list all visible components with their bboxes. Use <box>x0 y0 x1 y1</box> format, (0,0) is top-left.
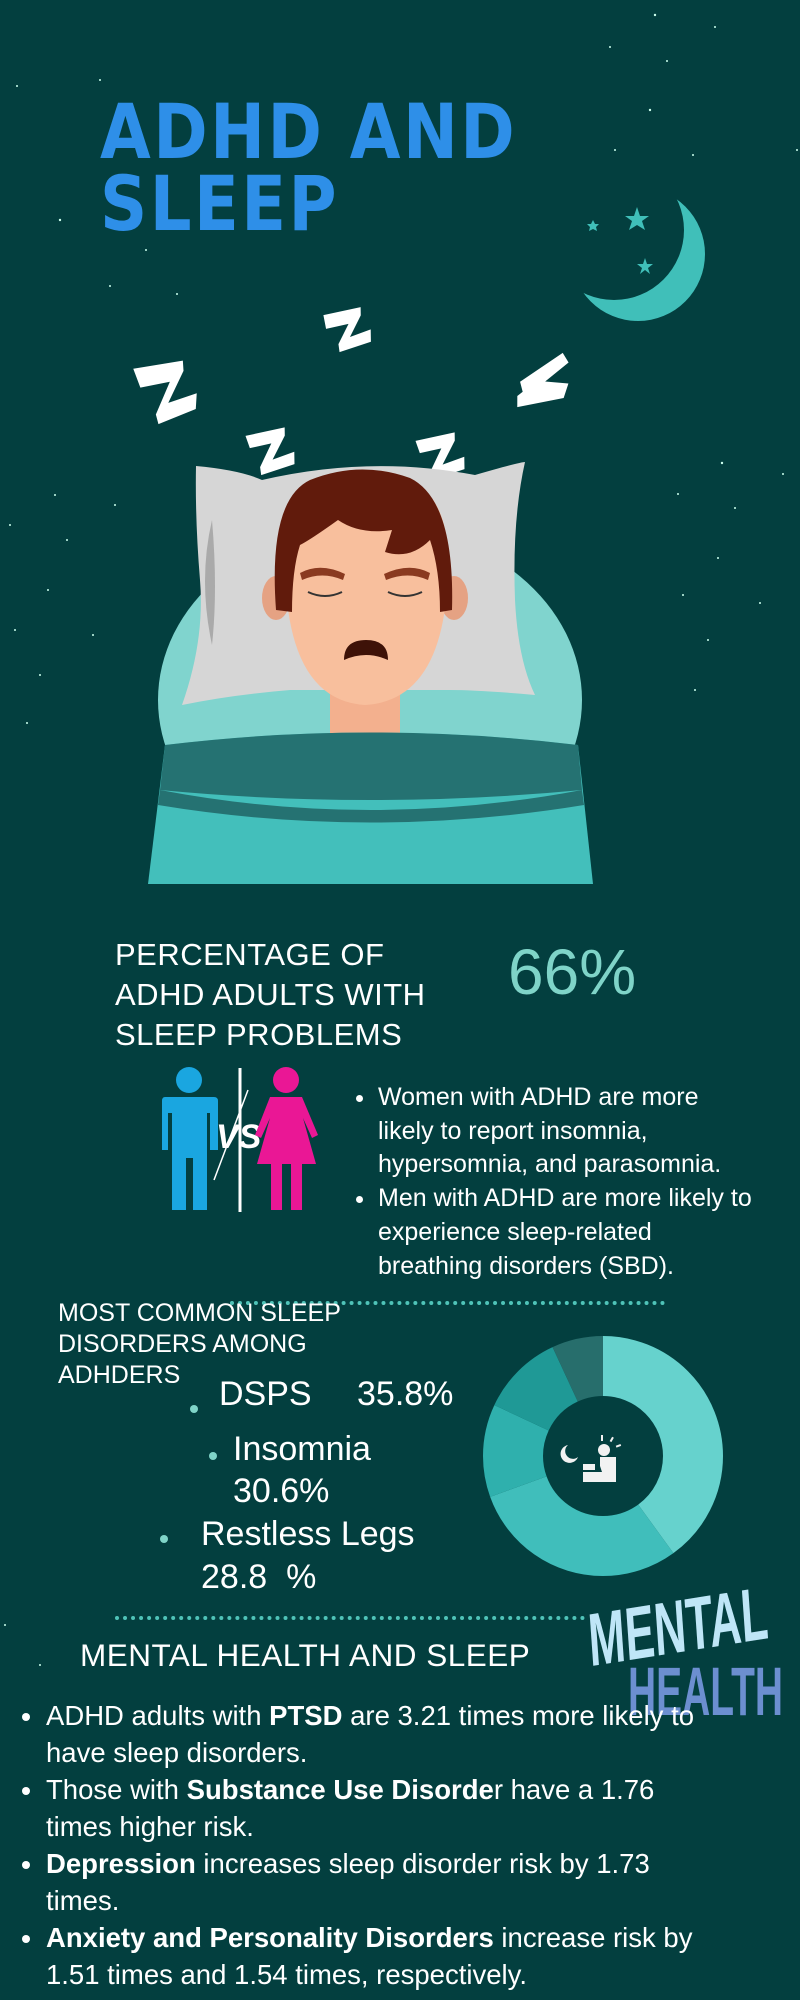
list: disorders: 35.8% <box>357 1375 453 1413</box>
list: disorders: 30.6% <box>233 1472 329 1510</box>
icon: man vs woman <box>162 1067 318 1212</box>
icon: bed wake <box>561 1435 621 1482</box>
title: ADHD AND <box>100 87 517 176</box>
headboard/bed back <box>158 525 582 875</box>
heading: mental health and sleep: MENTAL HEALTH AND SLEEP <box>80 1637 530 1673</box>
bullets: gender differences: Men with ADHD are more likely to <box>378 1184 752 1212</box>
ears <box>262 576 290 620</box>
blanket <box>148 732 593 884</box>
icon: mental health lettering: MENTAL <box>586 1570 771 1683</box>
heading: most common sleep disorders <box>58 1299 341 1389</box>
bullets: mental health: Anxiety and Personality Disorders increase risk by <box>46 1922 692 1953</box>
list: disorders: DSPS <box>219 1375 312 1413</box>
face <box>285 470 448 705</box>
pillow <box>182 462 535 705</box>
bullets: mental health <box>22 1700 694 1990</box>
heading: percentage: ADHD ADULTS WITH <box>115 977 426 1012</box>
bullets: mental health: Depression increases sleep disorder risk by 1.73 <box>46 1848 650 1879</box>
icon: man vs woman: VS <box>216 1118 262 1156</box>
list: disorders: 28.8 % <box>201 1558 316 1596</box>
hair <box>275 469 452 612</box>
bullets: gender differences: experience sleep-related <box>378 1218 652 1246</box>
bullets: gender differences: likely to report insomnia, <box>378 1117 648 1145</box>
bullets: mental health: times. <box>46 1885 119 1916</box>
mouth <box>344 640 388 660</box>
icon: mental health lettering <box>586 1570 783 1730</box>
bullets: gender differences: hypersomnia, and parasomnia. <box>378 1150 721 1178</box>
eyebrows <box>300 568 345 580</box>
bullets: mental health: have sleep disorders. <box>46 1737 307 1768</box>
neck <box>330 680 400 740</box>
bullets: gender differences: Women with ADHD are more <box>378 1083 698 1111</box>
bullets: gender differences <box>356 1083 752 1280</box>
bullets: mental health: times higher risk. <box>46 1811 254 1842</box>
illustration: sleeping man <box>133 307 593 884</box>
stat: 66%: 66% <box>508 936 636 1008</box>
icon: moon with stars <box>584 199 705 321</box>
list: disorders: Insomnia <box>233 1430 371 1468</box>
bullets: gender differences: breathing disorders (SBD). <box>378 1252 674 1280</box>
heading: most common sleep disorders: MOST COMMON SLEEP <box>58 1299 341 1327</box>
title: SLEEP <box>100 160 339 248</box>
shirt <box>232 732 500 790</box>
list: disorders <box>160 1375 453 1596</box>
chart: donut <box>483 1336 723 1576</box>
heading: most common sleep disorders: ADHDERS <box>58 1361 180 1389</box>
heading: percentage <box>115 937 426 1052</box>
eyes <box>308 592 342 596</box>
list: disorders: Restless Legs <box>201 1515 415 1553</box>
bullets: mental health: ADHD adults with PTSD are 3.21 times more likely to <box>46 1700 694 1731</box>
bullets: mental health: Those with Substance Use Disorder have a 1.76 <box>46 1774 654 1805</box>
heading: most common sleep disorders: DISORDERS AMONG <box>58 1330 307 1358</box>
bullets: mental health: 1.51 times and 1.54 times, respectively. <box>46 1959 527 1990</box>
zzz <box>133 304 572 481</box>
heading: percentage: SLEEP PROBLEMS <box>115 1017 402 1052</box>
title <box>100 87 517 248</box>
heading: percentage: PERCENTAGE OF <box>115 937 384 972</box>
